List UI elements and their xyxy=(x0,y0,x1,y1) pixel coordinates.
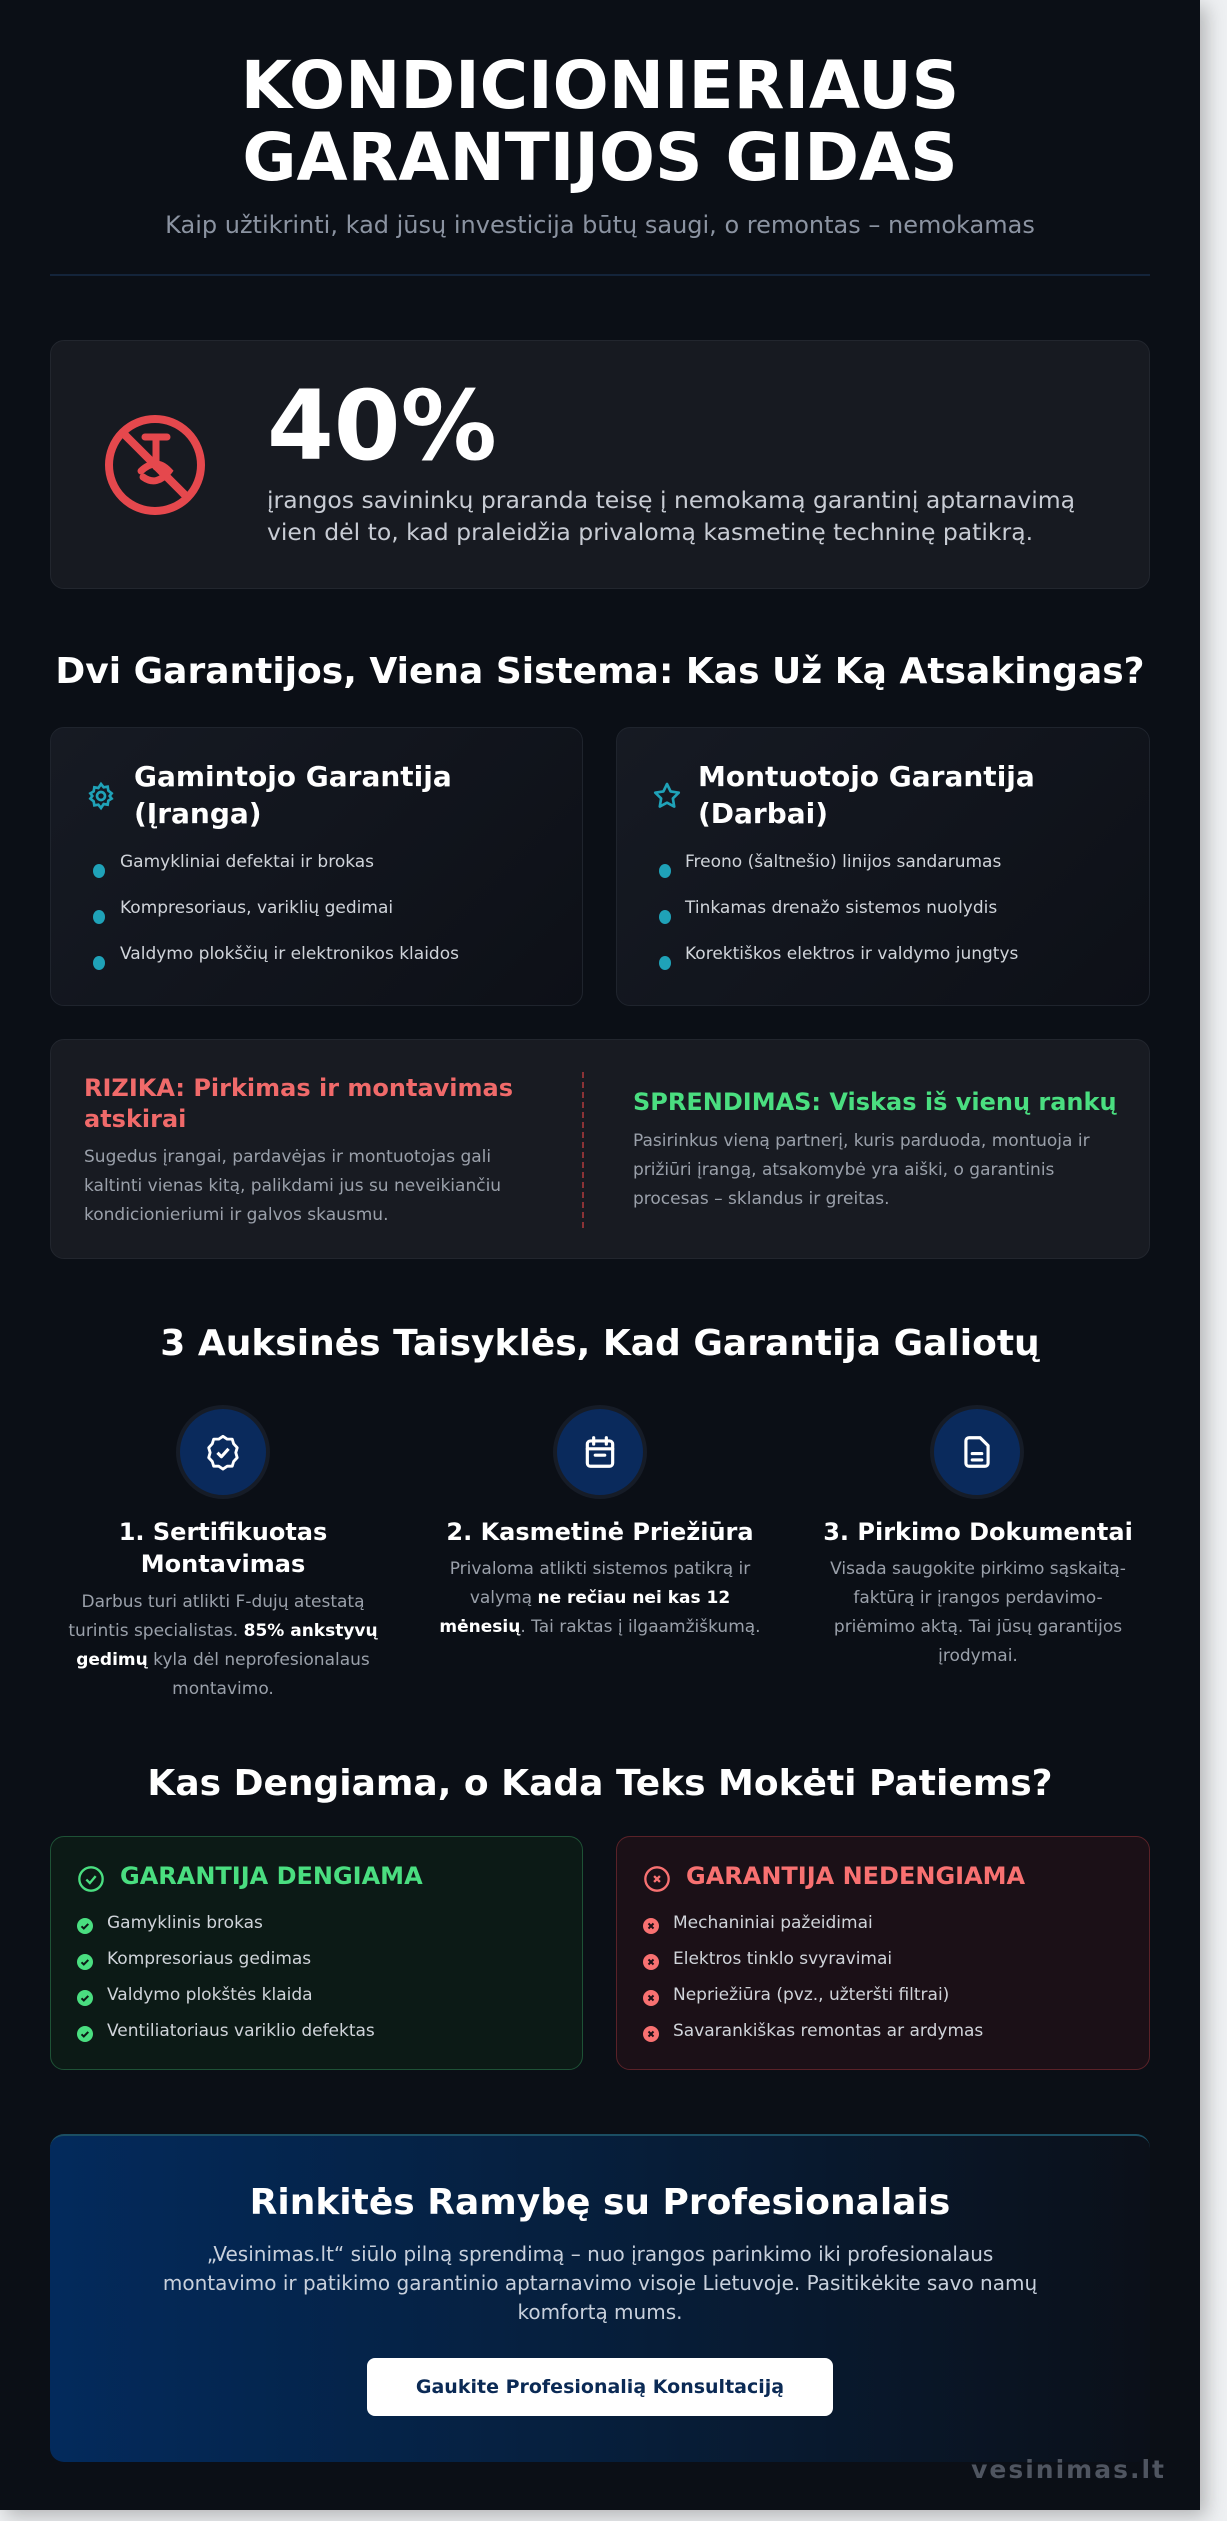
covered list: Valdymo plokštės klaida xyxy=(107,1985,313,2005)
footer brand: vesinimas.lt xyxy=(971,2455,1166,2484)
rule 3 xyxy=(823,1405,1133,1666)
covered list: Ventiliatoriaus variklio defektas xyxy=(107,2021,375,2041)
panel: call to action xyxy=(50,2134,1150,2462)
list xyxy=(659,852,1018,970)
panel: 40% statistic xyxy=(50,340,1150,589)
rule text: Privaloma atlikti sistemos patikrą ir valymą ne rečiau nei kas 12 mėnesių. Tai raktas į ilgaamžiškumą. xyxy=(439,1559,761,1637)
stat description: įrangos savininkų praranda teisę į nemokamą garantinį aptarnavimą vien dėl to, kad praleidžia privalomą kasmetinę techninę patikrą. xyxy=(267,486,1075,546)
list: Gamykliniai defektai ir brokas xyxy=(120,852,374,872)
title: KONDICIONIERIAUS xyxy=(241,47,959,124)
risk block: Sugedus įrangai, pardavėjas ir montuotojas gali kaltinti vienas kitą, palikdami jus su neveikiančiu kondicionieriumi ir galvos skausmu. xyxy=(84,1147,501,1225)
list: Tinkamas drenažo sistemos nuolydis xyxy=(685,898,997,918)
subtitle: Kaip užtikrinti, kad jūsų investicija būtų saugi, o remontas – nemokamas xyxy=(165,211,1035,239)
rule title: 2. Kasmetinė Priežiūra xyxy=(446,1518,754,1546)
rule 2 xyxy=(439,1405,761,1637)
CTA button xyxy=(367,2358,833,2416)
list xyxy=(93,852,459,970)
covered list xyxy=(77,1913,375,2042)
card title: (Įranga) xyxy=(134,797,262,830)
heading with x icon: GARANTIJA NEDENGIAMA xyxy=(686,1862,1025,1890)
panel: not covered xyxy=(616,1836,1150,2070)
icon: no-service tool xyxy=(105,415,205,515)
panel: manufacturer warranty xyxy=(50,727,583,1006)
not covered list: Savarankiškas remontas ar ardymas xyxy=(673,2021,983,2041)
heading: 3 golden rules: 3 Auksinės Taisyklės, Kad Garantija Galiotų xyxy=(160,1323,1040,1364)
risk block xyxy=(84,1074,513,1225)
card title: Montuotojo Garantija xyxy=(698,760,1035,793)
rule title: 3. Pirkimo Dokumentai xyxy=(823,1518,1133,1546)
list: Valdymo plokščių ir elektronikos klaidos xyxy=(120,944,459,964)
solution block xyxy=(633,1088,1117,1209)
icon: document xyxy=(930,1405,1024,1499)
title xyxy=(241,47,959,196)
CTA button: Gaukite Profesionalią Konsultaciją xyxy=(416,2376,784,2398)
not covered list: Nepriežiūra (pvz., užteršti filtrai) xyxy=(673,1985,949,2005)
icon: star xyxy=(654,782,680,808)
CTA text: „Vesinimas.lt“ siūlo pilną sprendimą – nuo įrangos parinkimo iki profesionalaus montavimo ir patikimo garantinio aptarnavimo visoje Lietuvoje. Pasitikėkite savo namų komfortą mums. xyxy=(163,2242,1037,2324)
covered list: Kompresoriaus gedimas xyxy=(107,1949,311,1969)
list: Freono (šaltnešio) linijos sandarumas xyxy=(685,852,1001,872)
card title xyxy=(134,760,452,830)
not covered list xyxy=(643,1913,983,2042)
card title xyxy=(698,760,1035,830)
icon: certified badge xyxy=(176,1405,270,1499)
list: Korektiškos elektros ir valdymo jungtys xyxy=(685,944,1018,964)
list: Kompresoriaus, variklių gedimai xyxy=(120,898,393,918)
solution block: SPRENDIMAS: Viskas iš vienų rankų xyxy=(633,1088,1117,1116)
rule text: Visada saugokite pirkimo sąskaitą-faktūrą ir įrangos perdavimo-priėmimo aktą. Tai jūsų garantijos įrodymai. xyxy=(830,1559,1126,1666)
rule text: Darbus turi atlikti F-dujų atestatą turintis specialistas. 85% ankstyvų gedimų kyla dėl neprofesionalaus montavimo. xyxy=(68,1592,378,1699)
panel: risk vs solution xyxy=(50,1039,1150,1259)
solution block: Pasirinkus vieną partnerį, kuris parduoda, montuoja ir prižiūri įrangą, atsakomybė yra aiški, o garantinis procesas – sklandus ir greitas. xyxy=(633,1131,1090,1209)
big number: 40% xyxy=(267,370,497,482)
panel: covered xyxy=(50,1836,583,2070)
heading: what is covered: Kas Dengiama, o Kada Teks Mokėti Patiems? xyxy=(147,1763,1053,1804)
CTA heading: Rinkitės Ramybę su Profesionalais xyxy=(250,2182,950,2223)
covered list: Gamyklinis brokas xyxy=(107,1913,263,1933)
card title: Gamintojo Garantija xyxy=(134,760,452,793)
icon: calendar xyxy=(553,1405,647,1499)
panel: installer warranty xyxy=(616,727,1150,1006)
not covered list: Elektros tinklo svyravimai xyxy=(673,1949,892,1969)
heading with check icon: GARANTIJA DENGIAMA xyxy=(120,1862,423,1890)
card title: (Darbai) xyxy=(698,797,828,830)
icon: gear xyxy=(88,782,114,810)
rule title: 1. Sertifikuotas Montavimas xyxy=(119,1518,327,1578)
rule 1 xyxy=(68,1405,378,1699)
not covered list: Mechaniniai pažeidimai xyxy=(673,1913,873,1933)
heading: two warranties: Dvi Garantijos, Viena Sistema: Kas Už Ką Atsakingas? xyxy=(55,651,1145,692)
risk block: RIZIKA: Pirkimas ir montavimas atskirai xyxy=(84,1074,513,1133)
title: GARANTIJOS GIDAS xyxy=(242,119,958,196)
